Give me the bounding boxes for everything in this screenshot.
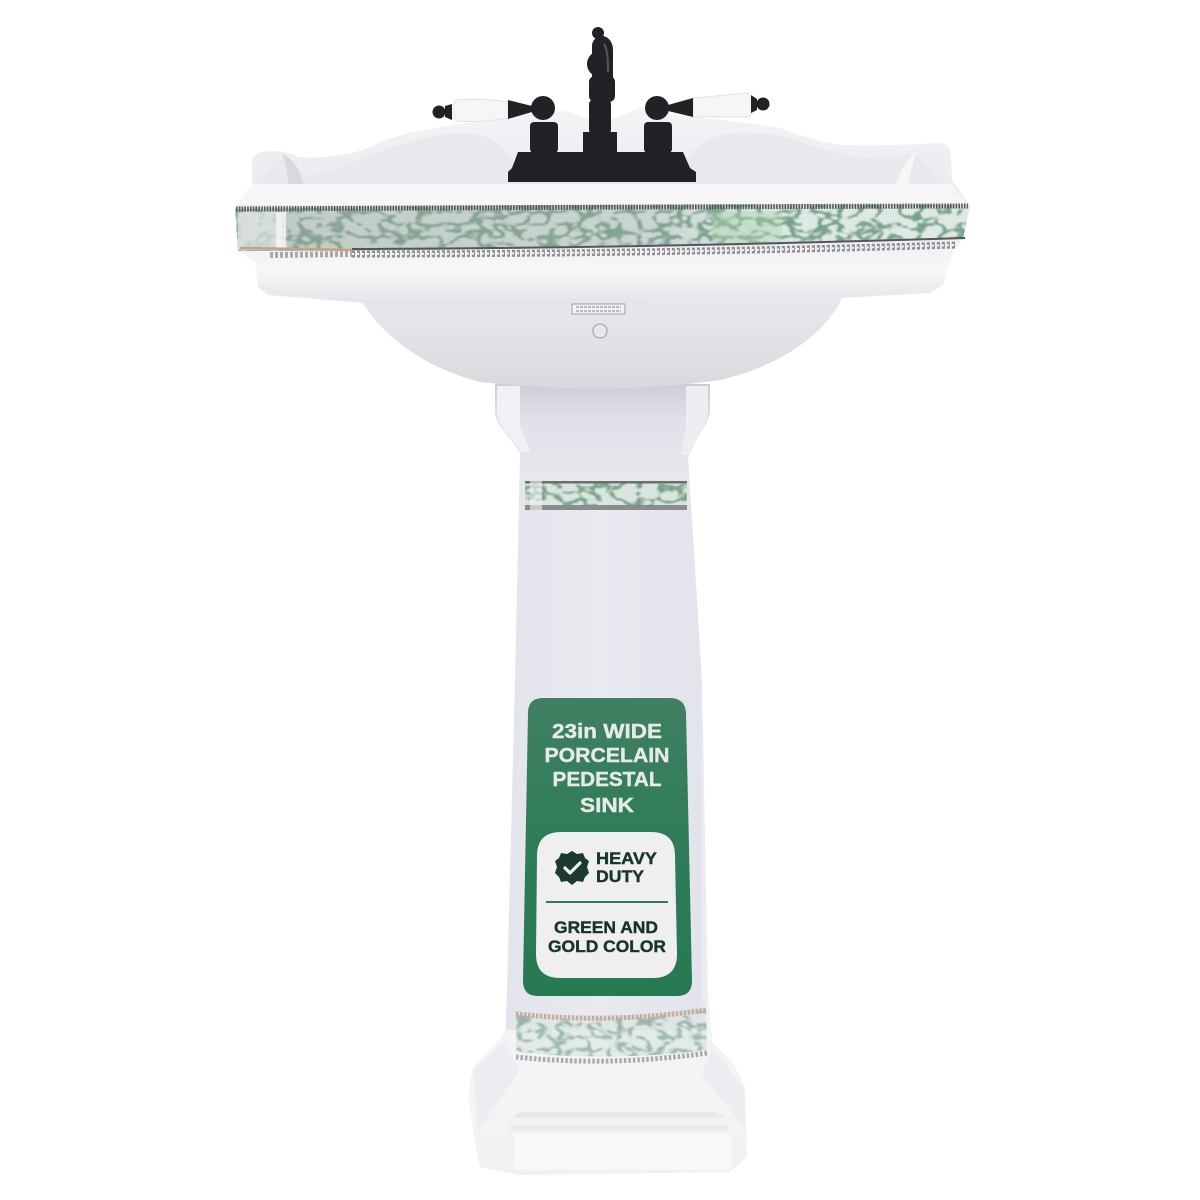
right porcelain lever: [668, 93, 770, 117]
sink rim with backsplash: [235, 107, 970, 209]
gooseneck spout: [583, 27, 617, 153]
badge green panel: [523, 698, 692, 996]
badge heading: PORCELAIN: [544, 744, 670, 767]
badge heading: 23in WIDE: [552, 720, 662, 743]
faucet base plate: [508, 152, 696, 182]
pedestal column: [495, 384, 712, 1042]
icon: seal with check: [555, 851, 589, 885]
badge heading: PEDESTAL: [552, 768, 662, 791]
pedestal lower decorative band: [516, 1010, 707, 1061]
left handle post: [530, 122, 558, 153]
pedestal base: [468, 1010, 747, 1175]
right handle post: [644, 122, 672, 153]
badge heading: [544, 720, 670, 817]
color label: [548, 918, 666, 956]
heavy duty label: HEAVY: [596, 849, 658, 868]
heavy duty label: DUTY: [596, 867, 645, 886]
basin label sticker and logo: [572, 304, 625, 338]
color label: GREEN AND: [554, 918, 658, 937]
badge white panel: [536, 832, 677, 978]
pedestal upper decorative band: [525, 481, 687, 510]
heavy duty label: [596, 849, 658, 886]
green and gold rim band: [235, 204, 970, 255]
sink basin bowl: [360, 298, 842, 389]
color label: GOLD COLOR: [548, 937, 666, 956]
sink front lip: [238, 238, 963, 304]
divider: [546, 901, 668, 903]
left porcelain lever: [432, 99, 532, 122]
badge heading: SINK: [580, 794, 634, 817]
handle caps: [531, 96, 669, 120]
product badge: [523, 698, 692, 996]
faucet: [432, 27, 770, 182]
